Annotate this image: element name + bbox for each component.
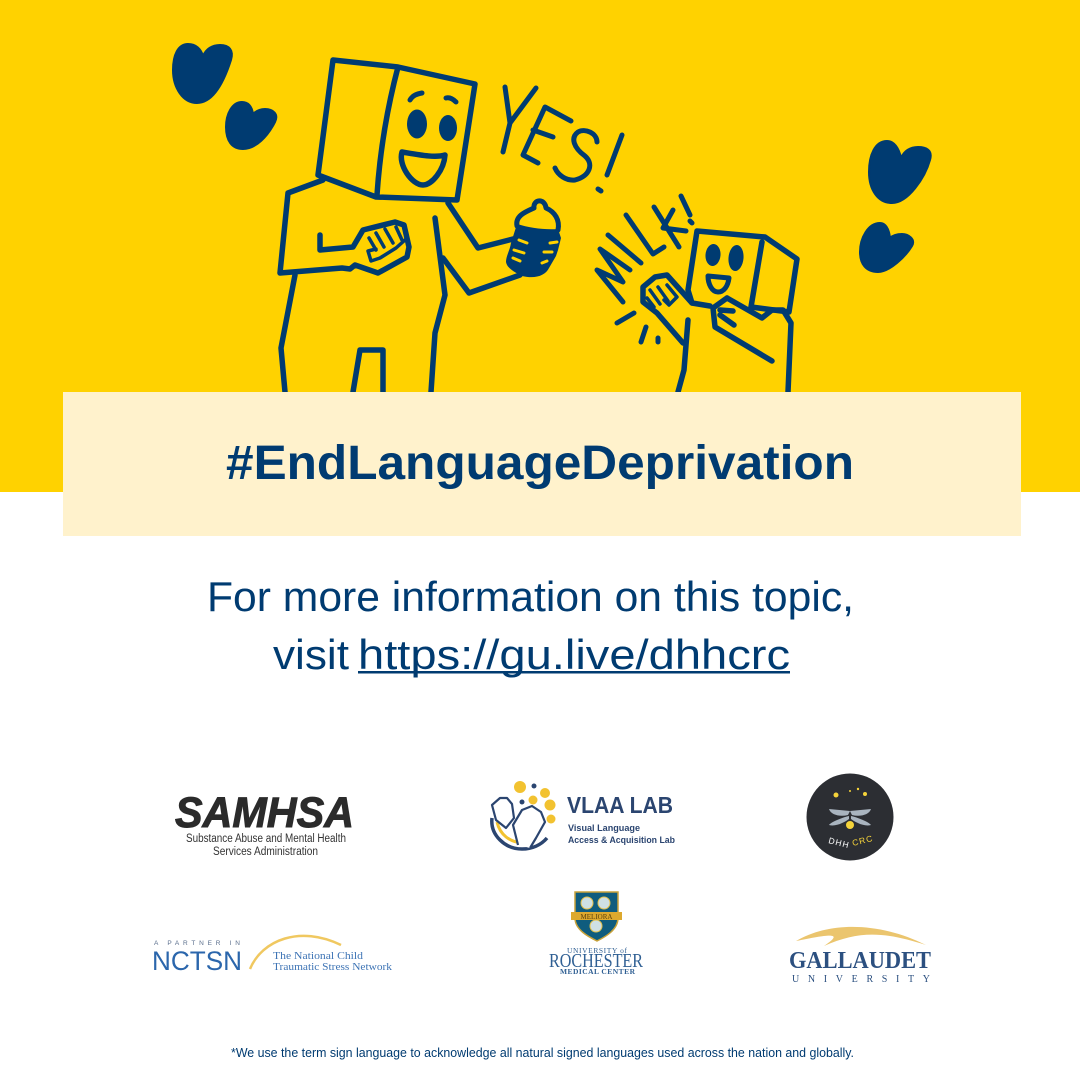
logo: VLAA Lab: VLAA LAB	[567, 792, 673, 818]
YES! lettering	[503, 87, 622, 191]
logo: University of Rochester Medical Center: ROCHESTER	[549, 950, 644, 972]
logo: SAMHSA	[175, 789, 354, 858]
more information text: visit	[273, 631, 349, 678]
icon: heart right large	[869, 141, 931, 203]
illustration: child signing MILK	[597, 196, 797, 392]
child fist and arm	[643, 275, 692, 343]
logo: University of Rochester Medical Center	[549, 892, 644, 976]
logo: NCTSN: Traumatic Stress Network	[273, 961, 393, 973]
hashtag heading: #EndLanguageDeprivation	[226, 437, 854, 490]
logo: SAMHSA: SAMHSA	[175, 789, 354, 837]
more information text: For more information on this topic,	[207, 573, 854, 620]
VLAA hands emblem	[492, 781, 556, 849]
logo: NCTSN: The National Child	[273, 950, 364, 962]
adult head box	[318, 60, 475, 200]
child face	[705, 243, 745, 292]
child body outline	[678, 298, 791, 392]
yellow background band	[0, 0, 1080, 492]
logo: VLAA Lab: Access & Acquisition Lab	[568, 835, 675, 846]
logo: University of Rochester Medical Center: MEDICAL CENTER	[560, 967, 636, 976]
icon: heart top left small	[226, 102, 276, 149]
MILK! lettering	[597, 196, 692, 302]
child hand on chest	[713, 298, 772, 361]
child fist detail	[647, 285, 677, 307]
more information text: https://gu.live/dhhcrc	[358, 631, 790, 678]
Rochester crest: MELIORA	[581, 913, 612, 921]
sign motion rays	[617, 313, 658, 342]
adult fist detail	[368, 227, 405, 261]
logo: University of Rochester Medical Center: UNIVERSITY of	[567, 946, 628, 955]
logo: VLAA Lab: Visual Language	[568, 823, 640, 834]
adult bottle arm	[443, 203, 520, 293]
hashtag banner	[63, 392, 1021, 536]
icon: heart right small	[860, 223, 913, 272]
footnote: *We use the term sign language to acknowledge all natural signed languages used across the nation and globally.	[231, 1045, 854, 1060]
logo: DHHCRC: CRC	[851, 833, 874, 848]
logo: Gallaudet University: GALLAUDET	[789, 948, 931, 974]
logo: DHHCRC: DHH	[828, 835, 851, 850]
logo: SAMHSA: Substance Abuse and Mental Health	[186, 833, 346, 845]
adult face	[401, 93, 457, 185]
adult torso and signing arm	[280, 180, 409, 273]
more information text	[207, 573, 854, 678]
logo: VLAA Lab	[492, 781, 675, 849]
adult legs and body	[281, 218, 445, 392]
icon: milk bottle	[506, 201, 561, 277]
logo: DHHCRC	[806, 774, 894, 860]
logo: NCTSN: NCTSN	[152, 946, 242, 976]
logo: NCTSN	[152, 936, 393, 976]
icon: heart top left large	[173, 44, 232, 103]
child head box	[688, 231, 797, 312]
logo: Gallaudet University	[789, 927, 931, 985]
logo: NCTSN: A PARTNER IN	[154, 940, 240, 947]
logo: SAMHSA: Services Administration	[213, 846, 318, 858]
illustration: adult signing YES with bottle	[280, 60, 561, 392]
logo: Gallaudet University: UNIVERSITY	[792, 974, 930, 985]
